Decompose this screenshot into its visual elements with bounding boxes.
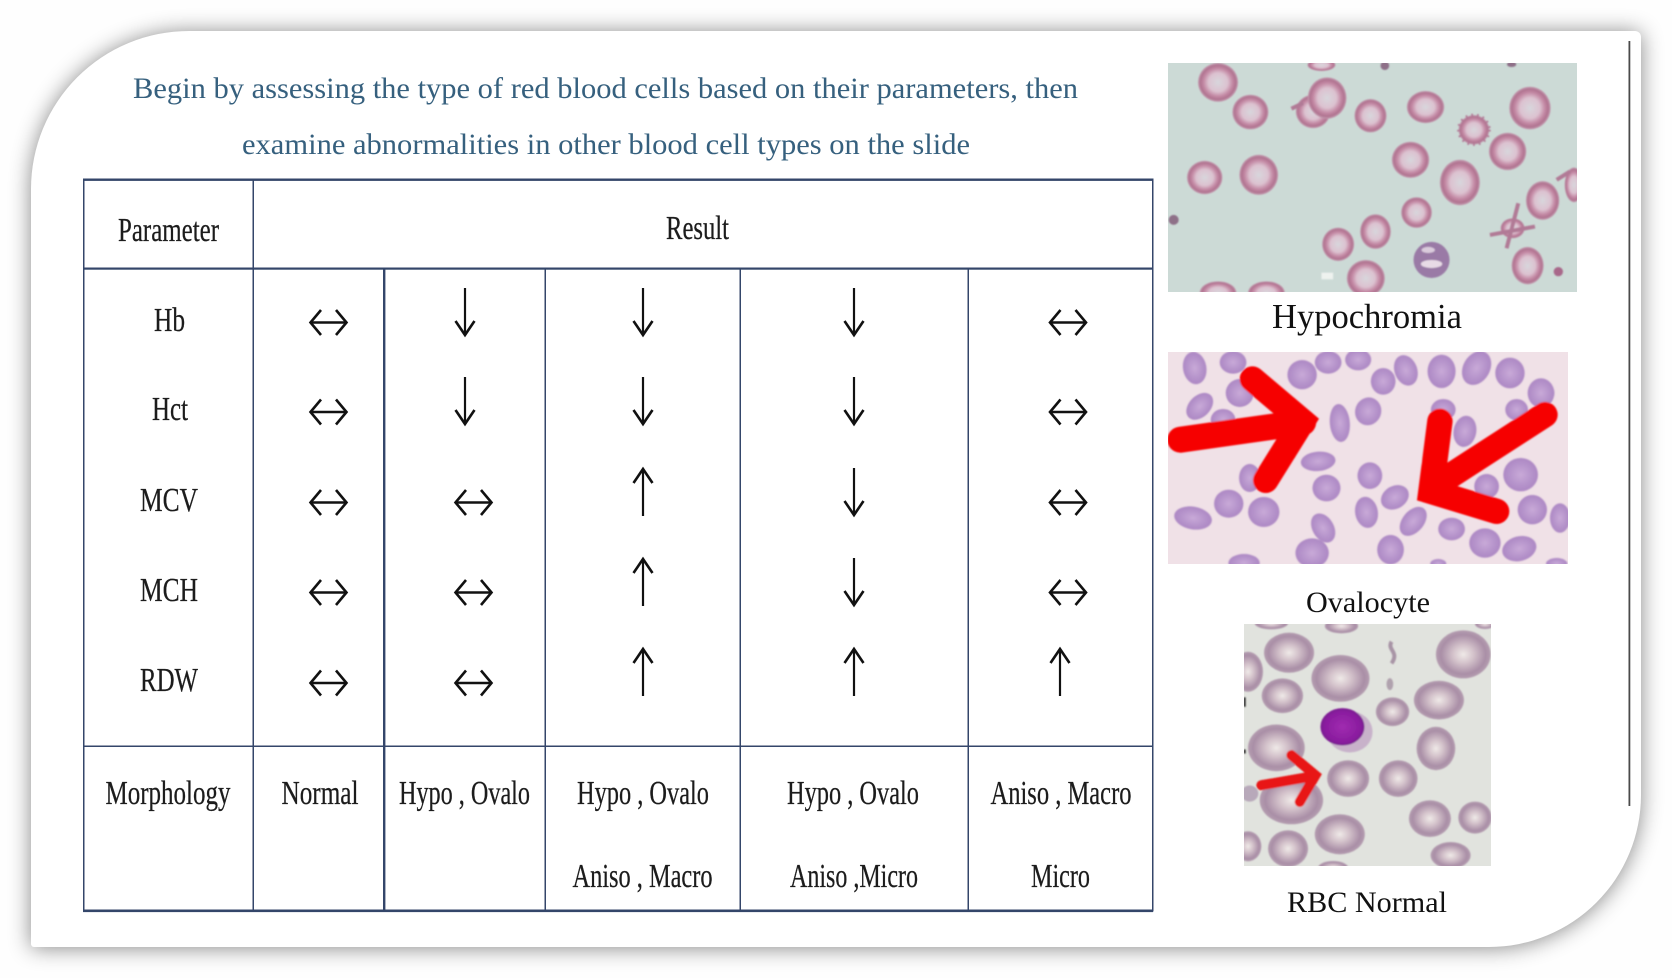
table: parameter results	[83, 178, 1154, 912]
micrograph: hypochromia	[1168, 63, 1577, 292]
vertical rule at right edge of card	[1628, 41, 1630, 806]
morphology row: Aniso , Macro	[990, 775, 1132, 812]
morphology row: Hypo , Ovalo	[399, 775, 530, 812]
row labels: Hb	[154, 302, 185, 339]
micrograph: ovalocyte	[1168, 352, 1568, 564]
header: result column: Result	[666, 210, 729, 247]
row labels	[140, 302, 199, 699]
row labels: MCV	[140, 482, 198, 519]
arrows: column 1	[310, 310, 346, 696]
caption: hypochromia: Hypochromia	[1272, 298, 1462, 336]
morphology row: Normal	[282, 775, 358, 812]
heading: instruction text	[133, 72, 1078, 161]
heading: instruction text: examine abnormalities in other blood cell types on the slide	[242, 128, 970, 161]
morphology row: Aniso ,Micro	[790, 858, 918, 895]
morphology row: Micro	[1031, 858, 1090, 895]
row labels: MCH	[140, 572, 198, 609]
morphology row: Aniso , Macro	[572, 858, 712, 895]
arrows: column 4	[844, 288, 864, 696]
micrograph: normal red blood cells	[1244, 624, 1491, 866]
header: parameter column: Parameter	[118, 212, 219, 249]
caption: ovalocyte: Ovalocyte	[1306, 586, 1430, 619]
arrows: column 2	[456, 288, 492, 696]
morphology row: Hypo , Ovalo	[577, 775, 709, 812]
morphology row: Hypo , Ovalo	[787, 775, 919, 812]
morphology row: Morphology	[106, 775, 230, 812]
row labels: Hct	[152, 391, 188, 428]
heading: instruction text: Begin by assessing the type of red blood cells based on their parameters, then	[133, 72, 1078, 105]
caption: rbc normal: RBC Normal	[1287, 886, 1447, 919]
row labels: RDW	[140, 662, 199, 699]
arrows: column 5	[1050, 310, 1086, 696]
morphology row	[106, 775, 1132, 895]
arrows: column 3	[634, 288, 652, 696]
